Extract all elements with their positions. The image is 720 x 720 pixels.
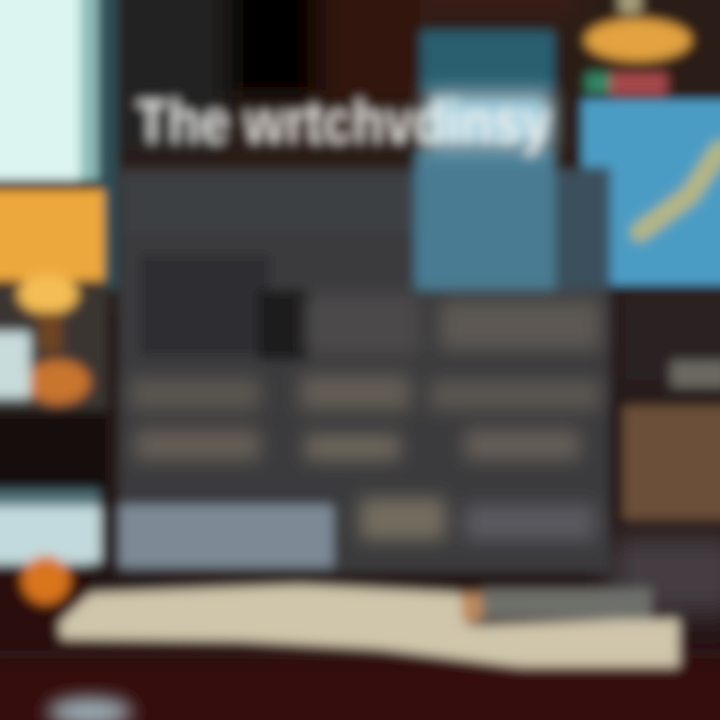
chart line on board	[640, 150, 720, 232]
lamp: top right	[584, 0, 692, 96]
orange lit panel on left	[0, 190, 104, 282]
panel: main translucent card	[118, 30, 610, 573]
bottom highlight	[48, 698, 132, 720]
open book on desk	[58, 584, 680, 668]
lamp and lower left objects	[0, 274, 108, 639]
window light: left column	[0, 0, 118, 290]
panel rows: table cells	[130, 295, 600, 540]
title: The wrtchvdinsy	[136, 88, 551, 157]
blue chart board: top right	[582, 100, 720, 285]
shelf tan: lower right	[622, 360, 720, 520]
title highlight over blue block	[425, 92, 553, 150]
